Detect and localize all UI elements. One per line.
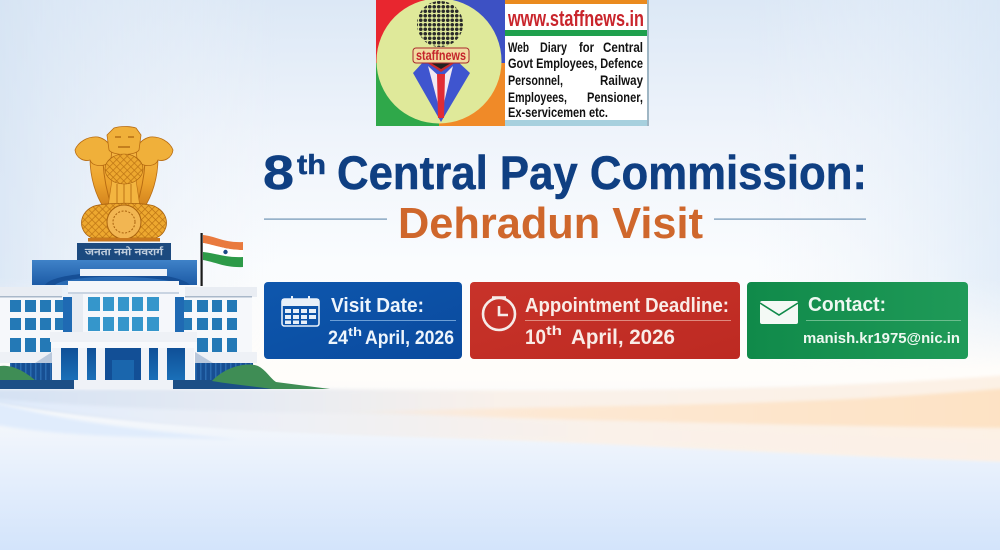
lotus base [82, 203, 166, 238]
icon: stopwatch [483, 298, 515, 330]
website panel [505, 0, 649, 126]
card: appointment deadline: April, 2026 [571, 326, 675, 349]
card: appointment deadline [470, 282, 740, 359]
lion bodies [90, 146, 158, 208]
card: visit date: 24 [328, 328, 348, 349]
building right wing [184, 287, 257, 381]
emblem pedestal with motto: जनता नमो नवरार्ग [84, 246, 164, 258]
card: contact: manish.kr1975@nic.in [803, 330, 960, 347]
card: contact [747, 282, 968, 359]
title: 8 [263, 147, 294, 200]
bushes and ground [0, 365, 330, 389]
centre lion [107, 126, 141, 154]
title: th [297, 149, 326, 180]
left lion head [75, 137, 112, 166]
illustration: government building with national emblem [0, 126, 330, 389]
website description: Railway [600, 72, 643, 88]
website description: Central [603, 39, 643, 55]
website description: Personnel, [508, 72, 563, 88]
logo: circular staffnews badge [376, 0, 505, 126]
card: visit date [264, 282, 462, 359]
card: visit date: th [348, 325, 362, 339]
icon: calendar [282, 296, 319, 326]
building roof [32, 260, 197, 285]
website description: for [579, 39, 594, 55]
right lion head [136, 137, 173, 166]
subtitle with side rules: Dehradun Visit [398, 199, 703, 248]
entrance steps [74, 380, 173, 389]
icon: indian flag [200, 233, 243, 286]
website description: Pensioner, [587, 89, 643, 105]
website description: Web [508, 39, 529, 55]
card: appointment deadline: Appointment Deadline: [525, 295, 729, 317]
building left wing [0, 287, 64, 381]
title: Central Pay Commission: [337, 146, 867, 199]
website description [508, 39, 643, 120]
website description: Govt Employees, Defence [508, 55, 643, 71]
card: contact: Contact: [808, 294, 886, 316]
card: visit date: Visit Date: [331, 295, 424, 317]
icon: envelope [760, 301, 798, 324]
card: appointment deadline: th [546, 323, 562, 338]
emblem pedestal with motto [77, 243, 171, 260]
card: appointment deadline: 10 [525, 326, 546, 349]
website description: Ex-servicemen etc. [508, 104, 608, 120]
card: visit date: April, 2026 [365, 328, 454, 349]
icon: national emblem [75, 126, 173, 242]
staffnews logo banner [376, 0, 649, 126]
logo: circular staffnews badge: staffnews [416, 47, 466, 63]
building centre block [50, 281, 197, 381]
website description: Employees, [508, 89, 567, 105]
website panel: www.staffnews.in [507, 6, 644, 31]
website description: Diary [540, 39, 567, 55]
